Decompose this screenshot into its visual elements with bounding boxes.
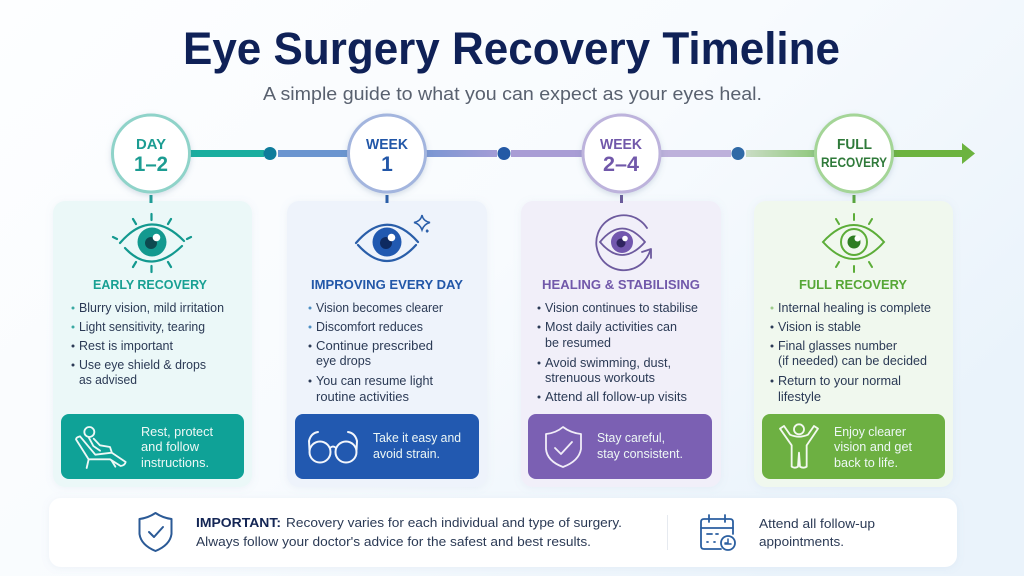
bullet list: You can resume light	[316, 374, 434, 388]
callout text: Take it easy and	[373, 431, 461, 445]
heading: full recovery: FULL RECOVERY	[799, 277, 907, 292]
icon: shield check	[140, 513, 172, 551]
bullet list: (if needed) can be decided	[778, 354, 927, 368]
milestone: week 1	[348, 115, 426, 203]
icon: glasses	[309, 432, 357, 462]
callout text	[373, 431, 461, 461]
timeline dot 1	[264, 147, 276, 160]
timeline dot 2	[498, 147, 510, 160]
bullet list: Return to your normal	[778, 374, 901, 388]
icon: reclining person	[76, 427, 126, 468]
important text: Recovery varies for each individual and type of surgery.	[286, 515, 622, 530]
panel: full recovery	[754, 115, 953, 487]
callout: enjoy	[762, 414, 945, 479]
callout text: vision and get	[834, 440, 913, 454]
panel: week 1	[287, 115, 487, 487]
icon: clear eye with rays	[823, 214, 884, 272]
important text: Always follow your doctor's advice for the safest and best results.	[196, 534, 591, 549]
callout text	[141, 425, 214, 470]
bullet list: Rest is important	[79, 339, 174, 353]
milestone: week 1: 1	[381, 153, 393, 176]
bullet list: Use eye shield & drops	[79, 358, 206, 372]
heading: improving every day: IMPROVING EVERY DAY	[311, 277, 463, 292]
important text: IMPORTANT:	[196, 515, 281, 530]
bullet list: as advised	[79, 373, 137, 387]
icon: calendar	[701, 515, 735, 550]
icon: eye with rays	[113, 214, 191, 272]
callout text: back to life.	[834, 456, 898, 470]
bullet list: strenuous workouts	[545, 371, 655, 385]
panel: week 2-4	[521, 115, 721, 487]
heading: healing and stabilising: HEALING & STABILISING	[542, 277, 700, 292]
bullet list: Most daily activities can	[545, 320, 677, 334]
icon: shield check	[546, 427, 581, 467]
icon: eye with circular arrow	[596, 215, 651, 270]
bullet list: Avoid swimming, dust,	[545, 356, 671, 370]
callout text: Rest, protect	[141, 425, 214, 439]
icon: person with raised arms	[780, 424, 818, 468]
milestone: full recovery: RECOVERY	[821, 155, 887, 170]
milestone: full recovery	[816, 115, 892, 203]
bullet list: Vision continues to stabilise	[545, 301, 698, 315]
milestone: week 1: WEEK	[366, 136, 408, 153]
bullet list	[770, 301, 931, 404]
bullet list: Attend all follow-up visits	[545, 390, 687, 404]
callout text: instructions.	[141, 456, 209, 470]
follow-up text: appointments.	[759, 534, 844, 549]
callout: take it easy	[295, 414, 479, 479]
bullet list: eye drops	[316, 354, 371, 368]
follow-up text	[759, 516, 875, 549]
bullet list: Vision becomes clearer	[316, 301, 443, 315]
bullet list: Light sensitivity, tearing	[79, 320, 205, 334]
milestone: day 1-2: DAY	[136, 136, 166, 153]
bullet list: Continue prescribed	[316, 339, 433, 353]
heading: early recovery: EARLY RECOVERY	[93, 277, 207, 292]
callout text: avoid strain.	[373, 447, 440, 461]
bullet list: Final glasses number	[778, 339, 897, 353]
bullet list: Blurry vision, mild irritation	[79, 301, 224, 315]
milestone: week 2-4: WEEK	[600, 136, 642, 153]
timeline dot 3	[732, 147, 744, 160]
bullet list: lifestyle	[778, 390, 821, 404]
important text	[196, 515, 622, 549]
milestone: day 1-2	[112, 115, 190, 203]
milestone: week 2-4	[583, 115, 660, 203]
callout text	[834, 425, 913, 470]
icon: eye with sparkle	[356, 215, 430, 261]
bullet list: routine activities	[316, 390, 409, 404]
subtitle: A simple guide to what you can expect as your eyes heal.	[263, 83, 762, 104]
callout text	[597, 431, 683, 461]
callout text: Stay careful,	[597, 431, 665, 445]
callout: stay careful	[528, 414, 712, 479]
title: Eye Surgery Recovery Timeline	[183, 23, 840, 74]
callout text: stay consistent.	[597, 447, 683, 461]
callout: rest	[61, 414, 244, 479]
bullet list	[538, 301, 698, 404]
milestone: full recovery: FULL	[837, 136, 872, 153]
callout text: and follow	[141, 440, 200, 454]
milestone: week 2-4: 2–4	[603, 153, 639, 176]
panel: day 1-2	[53, 115, 252, 487]
bullet list: Internal healing is complete	[778, 301, 931, 315]
timeline	[188, 143, 975, 164]
bullet list: Discomfort reduces	[316, 320, 423, 334]
bullet list: Vision is stable	[778, 320, 861, 334]
panel: important note	[49, 498, 957, 567]
milestone: day 1-2: 1–2	[134, 153, 168, 176]
bullet list: be resumed	[545, 336, 611, 350]
arrow head	[962, 143, 975, 164]
bullet list	[308, 301, 443, 404]
callout text: Enjoy clearer	[834, 425, 906, 439]
bullet list	[72, 301, 224, 387]
follow-up text: Attend all follow-up	[759, 516, 875, 531]
